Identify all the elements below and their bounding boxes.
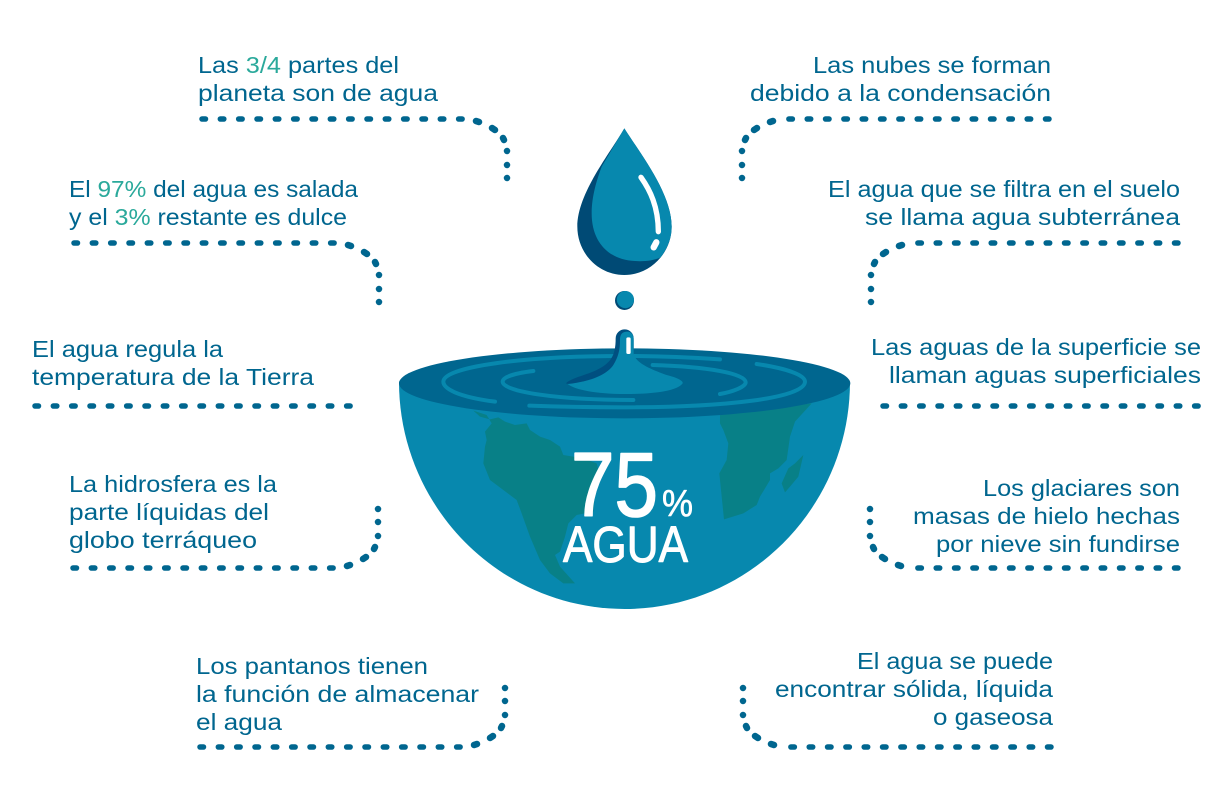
text block: agua subterranea [828,176,1180,230]
text block: glaciares: Los glaciares son [983,475,1180,501]
text block: regula la temperatura: temperatura de la Tierra [32,364,314,390]
connector: tres cuartas partes [202,119,507,178]
connector: hidrosfera [73,509,378,568]
text block: regula la temperatura [32,336,314,390]
text block: nubes [750,52,1051,106]
label: AGUA: AGUA [563,516,688,573]
text block: agua subterranea: El agua que se filtra en el suelo [828,176,1180,202]
text block: nubes: Las nubes se forman [813,52,1051,78]
big number: 75%: 75 [571,435,658,536]
continent: Madagascar [782,455,803,492]
icon: falling water drop [577,128,672,275]
text block: glaciares: masas de hielo hechas [913,503,1180,529]
text block: hidrosfera: globo terráqueo [69,527,257,553]
text block: tres cuartas partes [198,52,438,106]
globe bowl [399,329,850,609]
text block: pantanos: el agua [196,709,282,735]
connector: aguas superficiales [883,403,1201,409]
text block: estados del agua: El agua se puede [857,648,1053,674]
splash crest [566,329,634,390]
text block: agua salada y dulce: El 97% del agua es salada [69,176,358,202]
text block: aguas superficiales [871,334,1201,388]
connector: agua salada y dulce [74,243,379,302]
text block: hidrosfera: parte líquidas del [69,499,269,525]
text block: estados del agua: encontrar sólida, líquida [775,676,1053,702]
text block: tres cuartas partes: Las 3/4 partes del [198,52,399,78]
text block: agua salada y dulce: y el 3% restante es dulce [69,204,347,230]
connector: glaciares [870,509,1178,568]
connector: pantanos [200,688,505,747]
connector: nubes [742,119,1049,178]
continent: Africa [719,403,812,519]
text block: pantanos [196,653,479,735]
continent: South America [473,411,600,583]
water surface [399,348,850,418]
icon: small droplet [615,291,634,310]
text block: aguas superficiales: llaman aguas superficiales [889,362,1201,388]
text block: regula la temperatura: El agua regula la [32,336,223,362]
connector: regula la temperatura [35,403,354,409]
text block: pantanos: la función de almacenar [196,681,479,707]
big number: 75%: % [662,483,693,525]
connector: estados del agua [743,688,1051,747]
text block: nubes: debido a la condensación [750,80,1051,106]
text block: estados del agua: o gaseosa [933,704,1053,730]
text block: glaciares: por nieve sin fundirse [936,531,1180,557]
text block: agua subterranea: se llama agua subterránea [865,204,1180,230]
text block: glaciares [913,475,1180,557]
text block: pantanos: Los pantanos tienen [196,653,428,679]
text block: hidrosfera [69,471,277,553]
text block: aguas superficiales: Las aguas de la superficie se [871,334,1201,360]
connector: agua subterranea [871,243,1178,302]
text block: tres cuartas partes: planeta son de agua [198,80,438,106]
text block: estados del agua [775,648,1053,730]
text block: agua salada y dulce [69,176,358,230]
text block: hidrosfera: La hidrosfera es la [69,471,277,497]
hemisphere [399,382,850,609]
ripples [443,356,805,407]
